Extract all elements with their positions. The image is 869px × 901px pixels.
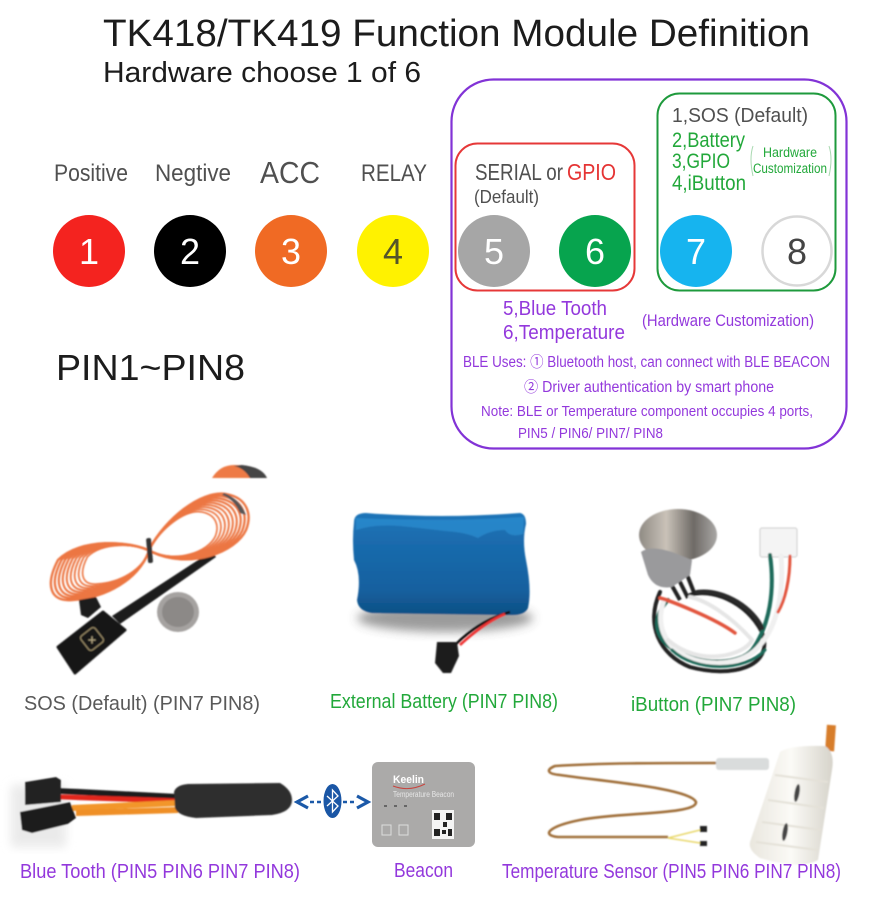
- panel: hardware options for pin 7 and 8: [658, 94, 836, 290]
- subtitle: Hardware choose 1 of 6: [103, 57, 421, 89]
- pin circles: 4: [383, 231, 403, 272]
- pin circles: 6: [585, 231, 605, 272]
- BLE and temperature text: Note: BLE or Temperature component occupies 4 ports,: [481, 403, 813, 420]
- label: Bluetooth: Blue Tooth (PIN5 PIN6 PIN7 PIN8): [20, 861, 300, 883]
- pin labels: [54, 155, 427, 190]
- pin circles: 2: [180, 231, 200, 272]
- BLE and temperature text: 5,Blue Tooth: [503, 298, 607, 320]
- panel: serial or GPIO: [456, 144, 634, 290]
- panel: serial or GPIO: SERIAL or: [475, 159, 563, 185]
- BLE and temperature text: ② Driver authentication by smart phone: [524, 378, 774, 396]
- icon: SOS button with orange wire: [51, 465, 267, 673]
- panel: hardware options for pin 7 and 8: Hardware: [763, 145, 817, 160]
- label: SOS: SOS (Default) (PIN7 PIN8): [24, 693, 260, 715]
- icon: temperature beacon: Temperature Beacon: [393, 790, 454, 799]
- icon: iButton connector: [639, 509, 797, 671]
- pin labels: Positive: [54, 160, 128, 187]
- pin circles: 5: [484, 231, 504, 272]
- pin circles: 8: [787, 231, 807, 272]
- panel: hardware options for pin 7 and 8: 1,SOS (Default): [672, 105, 808, 127]
- icon: white temperature sensor: [750, 725, 836, 865]
- panel: hardware options for pin 7 and 8: 4,iButton: [672, 172, 746, 195]
- icon: SOS button with orange wire: +: [88, 632, 97, 649]
- pin circles: 1: [79, 231, 99, 272]
- icon: temperature beacon: Keelin: [393, 774, 424, 786]
- icon: temperature beacon: [372, 762, 475, 847]
- arrow: Bluetooth link: [297, 784, 368, 818]
- icon: external battery: [353, 513, 533, 673]
- BLE and temperature text: (Hardware Customization): [642, 311, 814, 330]
- pin labels: ACC: [260, 155, 320, 190]
- pin circles: 3: [281, 231, 301, 272]
- pin labels: RELAY: [361, 160, 427, 187]
- label: external battery: External Battery (PIN7 PIN8): [330, 691, 558, 713]
- panel: serial or GPIO: (Default): [474, 187, 539, 207]
- title: TK418/TK419 Function Module Definition: [103, 13, 810, 55]
- pin circles: 7: [686, 231, 706, 272]
- panel: serial or GPIO: GPIO: [567, 159, 616, 185]
- icon: Bluetooth module: [11, 777, 292, 847]
- BLE and temperature text: PIN5 / PIN6/ PIN7/ PIN8: [518, 425, 663, 442]
- panel: hardware options for pin 7 and 8: Customization: [753, 161, 827, 176]
- BLE and temperature text: [463, 298, 830, 442]
- pin range label: PIN1~PIN8: [56, 347, 245, 388]
- label: beacon: Beacon: [394, 860, 453, 882]
- panel: hardware options for pin 7 and 8: 2,Battery: [672, 129, 745, 152]
- label: iButton: iButton (PIN7 PIN8): [631, 694, 796, 716]
- panel: hardware options for pin 7 and 8: 3,GPIO: [672, 150, 730, 173]
- BLE and temperature text: 6,Temperature: [503, 322, 625, 344]
- panel: BLE and temperature options: [452, 80, 846, 448]
- pin labels: Negtive: [155, 160, 231, 187]
- pin circles: [53, 215, 832, 287]
- icon: temperature probe and wire: [549, 758, 769, 846]
